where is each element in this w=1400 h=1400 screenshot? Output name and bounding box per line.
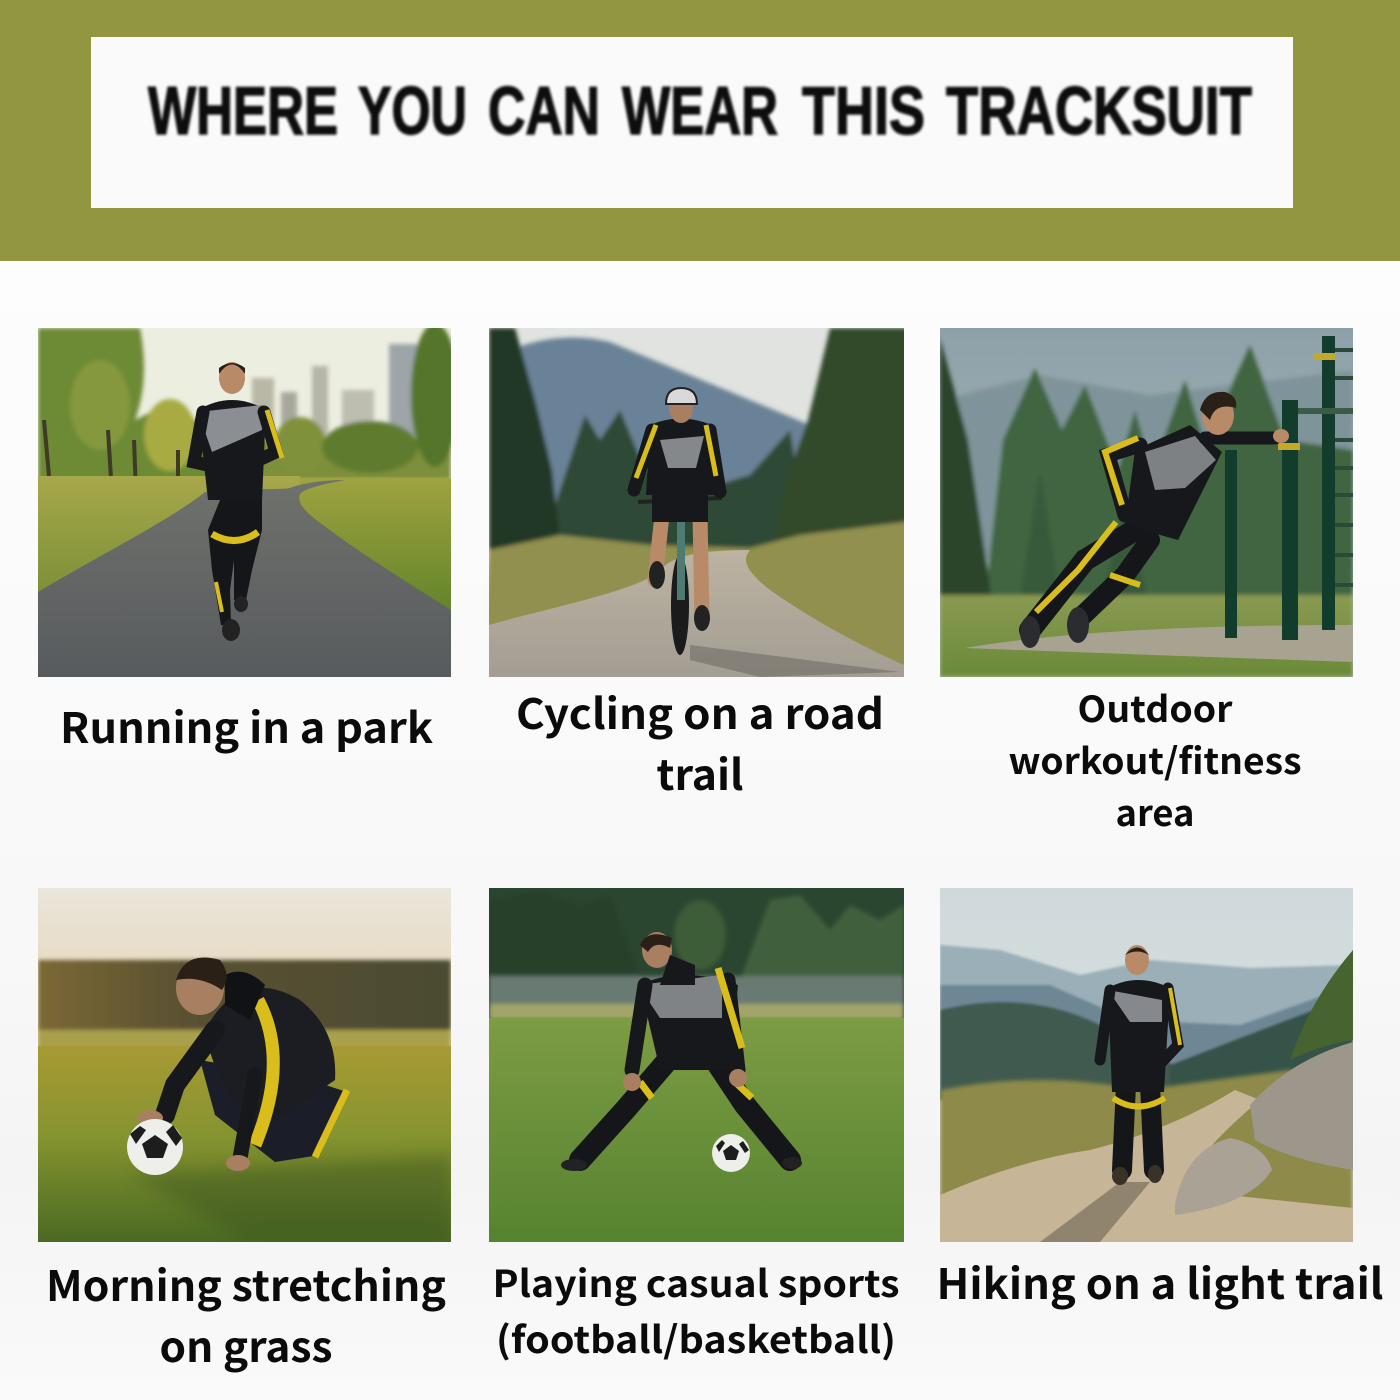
title: THIS (802, 73, 925, 149)
caption: morning stretching (46, 1253, 446, 1375)
caption: outdoor workout area: area (1116, 785, 1194, 837)
photo: playing casual sports (489, 888, 904, 1242)
soccer ball (712, 1134, 750, 1172)
exercise bars (1225, 336, 1353, 640)
title (148, 73, 1252, 149)
cyclist (634, 388, 722, 655)
grass (489, 1018, 904, 1242)
caption: running in a park: Running in a park (60, 695, 434, 756)
grass (38, 1046, 451, 1242)
caption: hiking on a light trail: Hiking on a light trail (936, 1251, 1384, 1312)
road (489, 550, 904, 677)
caption: playing casual sports (492, 1254, 900, 1364)
title: YOU (358, 73, 467, 149)
caption: outdoor workout area (1008, 681, 1302, 837)
photo: outdoor workout area (940, 328, 1353, 677)
title: WEAR (622, 73, 778, 149)
gravel patch (965, 625, 1353, 662)
caption: cycling on a road trail: trail (656, 742, 744, 803)
player (561, 932, 802, 1171)
grass shadow (130, 1155, 451, 1242)
trail (940, 1090, 1353, 1242)
photo: hiking on a light trail (940, 888, 1353, 1242)
header band (0, 0, 1400, 261)
road shadow (690, 645, 900, 677)
runner (194, 362, 282, 641)
lawns (38, 476, 300, 592)
park path (38, 480, 451, 677)
caption: morning stretching: Morning stretching (46, 1253, 446, 1314)
crouching athlete (137, 958, 347, 1171)
caption: outdoor workout area: Outdoor (1078, 681, 1233, 733)
title panel (91, 37, 1293, 208)
title: TRACKSUIT (946, 73, 1252, 149)
ground shadow (1040, 1182, 1150, 1242)
athlete (1020, 392, 1289, 648)
title: CAN (488, 73, 600, 149)
caption: playing casual sports: Playing casual sports (492, 1254, 900, 1308)
tree trunks (42, 420, 180, 476)
hiker (1100, 945, 1180, 1185)
photo: running in a park (38, 323, 459, 677)
caption: outdoor workout area: workout/fitness (1008, 733, 1302, 785)
photo: cycling on a road trail (480, 328, 920, 690)
caption: playing casual sports: (football/basketball) (496, 1310, 896, 1364)
soccer ball (127, 1119, 183, 1175)
photo: morning stretching on grass (38, 888, 451, 1242)
caption: morning stretching: on grass (160, 1314, 332, 1375)
shrub (1290, 950, 1353, 1060)
caption: cycling on a road trail: Cycling on a road (516, 681, 884, 742)
rocks (1250, 1042, 1353, 1170)
title: WHERE (148, 73, 338, 149)
caption: cycling on a road trail (516, 681, 884, 803)
